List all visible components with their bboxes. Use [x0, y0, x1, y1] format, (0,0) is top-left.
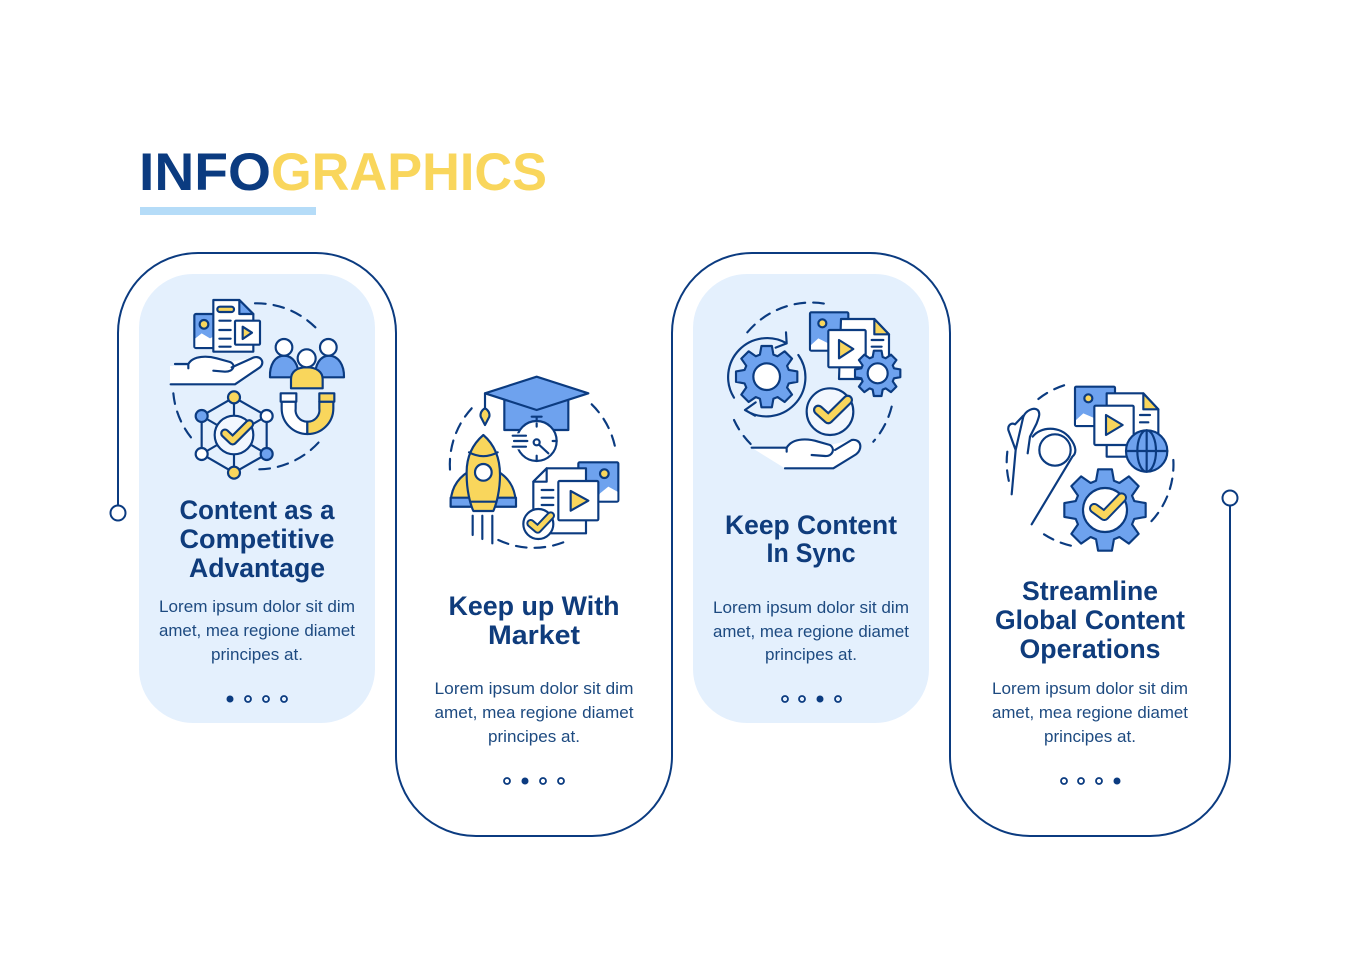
body text: card 1 [159, 597, 355, 664]
body text: card 4: principes at. [1044, 727, 1136, 746]
body text: card 1: amet, mea regione diamet [159, 621, 355, 640]
heading: card 1: Content as a [180, 495, 335, 525]
body text: card 2: Lorem ipsum dolor sit dim [434, 679, 634, 698]
body text: card 3: amet, mea regione diamet [713, 622, 909, 641]
heading: card 1: Advantage [189, 553, 325, 583]
pagination dots: card 4 [1061, 778, 1120, 784]
heading: card 3 [725, 510, 897, 568]
heading: card 1 [180, 495, 335, 583]
body text: card 1: principes at. [211, 645, 303, 664]
connecting outline [110, 253, 1238, 836]
icon: streamline global content [1007, 385, 1173, 551]
body text: card 2 [434, 679, 634, 746]
body text: card 3 [713, 598, 909, 664]
body text: card 1: Lorem ipsum dolor sit dim [159, 597, 355, 616]
pagination dots: card 1 [226, 696, 287, 702]
title [139, 143, 547, 202]
pagination dots: card 3 [782, 696, 841, 702]
heading: card 4: Operations [1020, 634, 1160, 664]
panel: card 1 background [139, 274, 375, 723]
heading: card 2: Market [488, 620, 580, 650]
panel: card 3 background [693, 274, 929, 723]
body text: card 4: Lorem ipsum dolor sit dim [992, 679, 1188, 698]
body text: card 4: amet, mea regione diamet [992, 703, 1188, 722]
title: INFO [139, 143, 271, 202]
heading: card 1: Competitive [180, 524, 334, 554]
body text: card 3: principes at. [765, 645, 857, 664]
icon: keep up with market [450, 377, 618, 548]
heading: card 2: Keep up With [448, 591, 620, 621]
body text: card 2: amet, mea regione diamet [434, 703, 634, 722]
heading: card 3: Keep Content [725, 510, 897, 540]
heading: card 4: Streamline [1022, 576, 1158, 606]
pagination dots: card 2 [504, 778, 564, 784]
body text: card 2: principes at. [488, 727, 580, 746]
title underline [140, 207, 316, 215]
body text: card 4 [992, 679, 1188, 746]
heading: card 3: In Sync [766, 538, 856, 568]
heading: card 4: Global Content [995, 605, 1185, 635]
heading: card 2 [448, 591, 620, 650]
icon: keep content in sync [728, 303, 900, 468]
body text: card 3: Lorem ipsum dolor sit dim [713, 598, 909, 617]
heading: card 4 [995, 576, 1185, 664]
title: GRAPHICS [271, 143, 547, 202]
icon: content advantage [170, 300, 344, 479]
